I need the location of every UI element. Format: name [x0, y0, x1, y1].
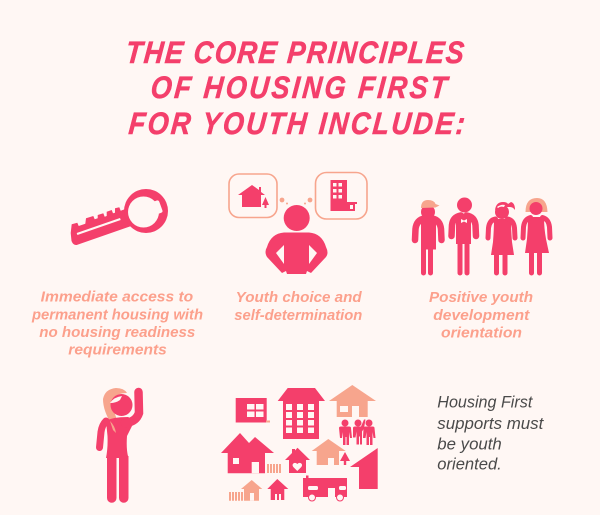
- three small people: [339, 420, 376, 445]
- thought dots: [280, 198, 312, 204]
- caption: positive youth development: [429, 290, 533, 342]
- text: youth oriented statement: supports must: [437, 414, 545, 433]
- icon: thinking person with housing options: [229, 172, 367, 274]
- person: girl with ponytail: [488, 202, 515, 276]
- speech box: apartment building: [316, 172, 367, 219]
- icon cluster: housing options: [221, 385, 378, 501]
- caption: immediate access: [31, 290, 203, 358]
- large pink house: [221, 433, 274, 473]
- title: OF HOUSING FIRST: [149, 71, 450, 105]
- text: youth oriented statement: Housing First: [437, 393, 534, 412]
- caption: youth choice: [234, 290, 363, 324]
- salmon house large: [329, 385, 376, 417]
- caption: immediate access: permanent housing with: [31, 307, 203, 323]
- caption: immediate access: no housing readiness: [39, 325, 195, 341]
- icon: key: [71, 189, 168, 245]
- person: girl with long hair: [523, 198, 550, 276]
- text: youth oriented statement: be youth: [437, 434, 502, 454]
- caption: positive youth development: development: [433, 308, 531, 324]
- fence: [267, 464, 281, 473]
- title: FOR YOUTH INCLUDE:: [127, 107, 466, 141]
- caption: immediate access: requirements: [68, 342, 167, 358]
- title: THE CORE PRINCIPLES: [124, 36, 466, 70]
- caption: immediate access: Immediate access to: [41, 290, 193, 306]
- caption: positive youth development: orientation: [441, 326, 522, 342]
- speech box: house: [229, 174, 277, 218]
- salmon house medium: [312, 439, 346, 465]
- small pink house: [267, 479, 288, 500]
- bus: [303, 476, 347, 501]
- title: [124, 36, 466, 141]
- small salmon house with fence: [229, 480, 262, 501]
- person: boy with bow tie: [452, 198, 476, 276]
- icon: woman waving: [100, 388, 139, 503]
- building with windows: [236, 398, 270, 422]
- sloped building: [350, 448, 378, 489]
- person: boy with cap: [415, 200, 442, 276]
- caption: youth choice: Youth choice and: [236, 290, 363, 306]
- text: youth oriented statement: oriented.: [437, 454, 502, 474]
- caption: youth choice: self-determination: [234, 308, 362, 324]
- house with heart: [285, 448, 310, 473]
- apartment block: [278, 388, 325, 439]
- person: [266, 205, 328, 274]
- tree: [340, 452, 350, 465]
- caption: positive youth development: Positive youth: [429, 290, 533, 306]
- icon: four young people: [415, 198, 550, 276]
- text: youth oriented statement: [437, 393, 545, 474]
